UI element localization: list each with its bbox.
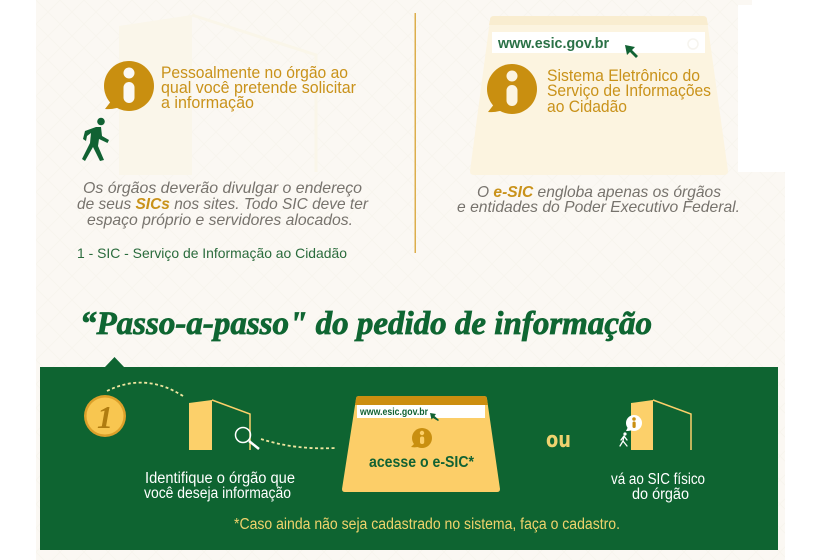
browser window card: acesse o e-SIC* [369, 454, 475, 471]
dotted connector to window [261, 439, 335, 448]
in-person description: espaço próprio e servidores alocados. [87, 212, 353, 229]
step text: identify [144, 470, 295, 502]
in-person description [77, 180, 369, 229]
e-SIC heading text: Sistema Eletrônico do [547, 67, 700, 85]
icon: info speech bubble [487, 64, 537, 114]
icon: cursor arrow [625, 45, 638, 58]
in-person description: Os órgãos deverão divulgar o endereço [83, 180, 362, 197]
icon: walking person [82, 118, 109, 161]
dotted connector to building [107, 383, 183, 396]
footnote: SIC definition: 1 - SIC - Serviço de Informação ao Cidadão [77, 245, 347, 261]
in-person heading text: Pessoalmente no órgão ao [161, 64, 348, 82]
or label: ou [546, 428, 571, 453]
step text: visit: do órgão [632, 486, 689, 503]
e-SIC description [457, 184, 740, 216]
panel: electronic request [457, 16, 740, 216]
panel: step 1 [40, 357, 778, 550]
browser window card: www.esic.gov.br [359, 406, 428, 418]
step number coin [84, 395, 126, 437]
in-person description: de seus SICs nos sites. Todo SIC deve ter [77, 196, 369, 213]
ghost building illustration [119, 15, 316, 175]
web address: www.esic.gov.br [497, 35, 609, 52]
green panel background [40, 357, 778, 550]
browser window card [342, 396, 500, 492]
ghost browser window [470, 16, 728, 175]
in-person heading text: qual você pretende solicitar [161, 79, 356, 97]
icon: physical SIC building [620, 400, 691, 450]
e-SIC description: e entidades do Poder Executivo Federal. [457, 199, 740, 216]
e-SIC heading text: Serviço de Informações [547, 82, 711, 100]
e-SIC heading text: ao Cidadão [547, 98, 627, 116]
in-person heading text [161, 64, 356, 112]
step text: visit [611, 471, 705, 503]
e-SIC heading text [547, 67, 711, 116]
icon: info speech bubble [104, 61, 154, 111]
in-person heading text: a informação [161, 94, 254, 112]
icon: building [189, 400, 250, 450]
icon: magnifying glass [236, 428, 259, 449]
title: “Passo-a-passo" do pedido de informação [80, 306, 652, 342]
step text: identify: você deseja informação [144, 485, 291, 502]
step text: visit: vá ao SIC físico [611, 471, 705, 488]
panel: in-person request [77, 15, 369, 261]
step text: identify: Identifique o órgão que [145, 470, 295, 487]
registration note: *Caso ainda não seja cadastrado no sistema, faça o cadastro. [234, 516, 620, 533]
step number coin: 1 [97, 399, 113, 435]
e-SIC description: O e-SIC engloba apenas os órgãos [477, 184, 721, 201]
